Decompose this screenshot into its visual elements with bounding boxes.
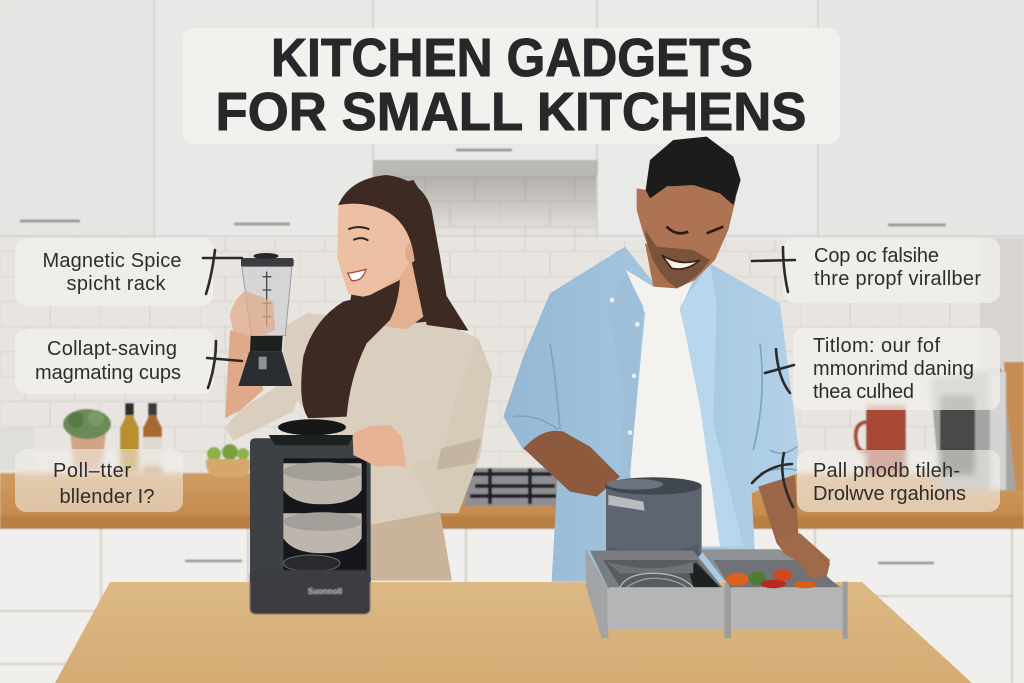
callout: middle right: Titlom: our fof	[813, 335, 940, 357]
fingers on tower	[353, 426, 403, 467]
blender base	[238, 336, 292, 386]
callout: top right	[783, 238, 1000, 303]
right tray	[700, 549, 848, 639]
callout: bottom right	[797, 450, 1000, 512]
cutting boards and tablet	[930, 362, 1024, 490]
callout: top right: thre propf virallber	[814, 268, 981, 290]
woman	[225, 175, 492, 613]
sleeve folds	[513, 343, 797, 473]
title panel	[183, 28, 840, 144]
smile	[348, 269, 366, 281]
hand on blender	[230, 291, 275, 342]
countertop	[0, 473, 1024, 517]
upper cabinets	[0, 0, 1024, 240]
buttons	[612, 300, 637, 433]
right placket	[680, 263, 743, 547]
smile	[662, 255, 700, 269]
far sleeve	[410, 338, 492, 513]
callout: collapsible cups: magmating cups	[35, 362, 181, 384]
red mug	[856, 405, 906, 475]
shirt body	[503, 247, 798, 582]
forearm and hand	[523, 431, 620, 497]
torso	[287, 313, 490, 525]
eyes	[667, 227, 723, 233]
marker: bottom right	[752, 453, 793, 507]
pants	[370, 512, 452, 581]
sleeve band	[437, 438, 482, 470]
oil bottles	[120, 403, 162, 472]
neck	[645, 243, 710, 288]
gas stove	[465, 468, 560, 506]
hair back	[350, 180, 468, 331]
man	[503, 183, 830, 582]
vegetables	[726, 569, 816, 588]
callout: blender: Poll–tter	[53, 460, 131, 482]
left placket	[607, 273, 643, 503]
range hood	[373, 160, 598, 175]
callout: bottom right: Drolwve rgahions	[813, 483, 966, 505]
potted plant	[63, 409, 111, 470]
eye and brow	[348, 227, 369, 241]
callout: collapsible cups: Collapt-saving	[47, 338, 177, 360]
callout: middle right: mmonrimd daning	[813, 358, 974, 380]
callout: magnetic spice rack: spicht rack	[66, 273, 166, 295]
callout: magnetic spice rack: Magnetic Spice	[42, 250, 182, 272]
callout: middle right	[793, 328, 1000, 410]
white t-shirt	[626, 270, 720, 547]
hand on tray	[778, 533, 830, 578]
marker: middle right	[765, 349, 794, 393]
hair lock	[301, 280, 400, 418]
forearm	[225, 330, 263, 418]
callout: blender: bllender I?	[60, 486, 154, 508]
drawer organizer	[585, 533, 848, 639]
ear	[405, 243, 417, 263]
hair top	[338, 175, 468, 331]
callout: blender	[15, 449, 183, 512]
tower label: Suonnoll	[308, 587, 342, 596]
near sleeve	[225, 312, 310, 441]
face	[337, 198, 414, 297]
marker: spice rack	[203, 250, 242, 294]
beard	[645, 230, 710, 288]
face and ear	[637, 183, 736, 288]
neck	[367, 253, 423, 329]
backsplash tiles	[0, 176, 1024, 486]
glass jars	[0, 425, 34, 470]
right forearm	[758, 475, 830, 580]
callout: magnetic spice rack	[15, 238, 213, 306]
hood shadow on backsplash	[373, 172, 598, 237]
tower base over island	[250, 570, 370, 614]
blender	[241, 253, 294, 336]
callout: top right: Cop oc falsihe	[814, 245, 939, 267]
right wall	[980, 237, 1024, 367]
title panel: FOR SMALL KITCHENS	[216, 82, 806, 142]
left tray	[585, 548, 731, 638]
marker: top right	[752, 247, 795, 292]
lower cabinets	[0, 529, 1024, 683]
foldable tower organizer	[250, 419, 371, 613]
title panel: KITCHEN GADGETS	[271, 28, 753, 88]
fruit bowl	[206, 444, 250, 477]
callout: collapsible cups	[15, 329, 213, 394]
pot	[605, 477, 702, 568]
callout: bottom right: Pall pnodb tileh-	[813, 460, 960, 482]
callout: middle right: thea culhed	[813, 381, 914, 403]
marker: cups	[207, 341, 242, 388]
hand on tower	[353, 425, 407, 467]
island counter	[55, 582, 972, 683]
